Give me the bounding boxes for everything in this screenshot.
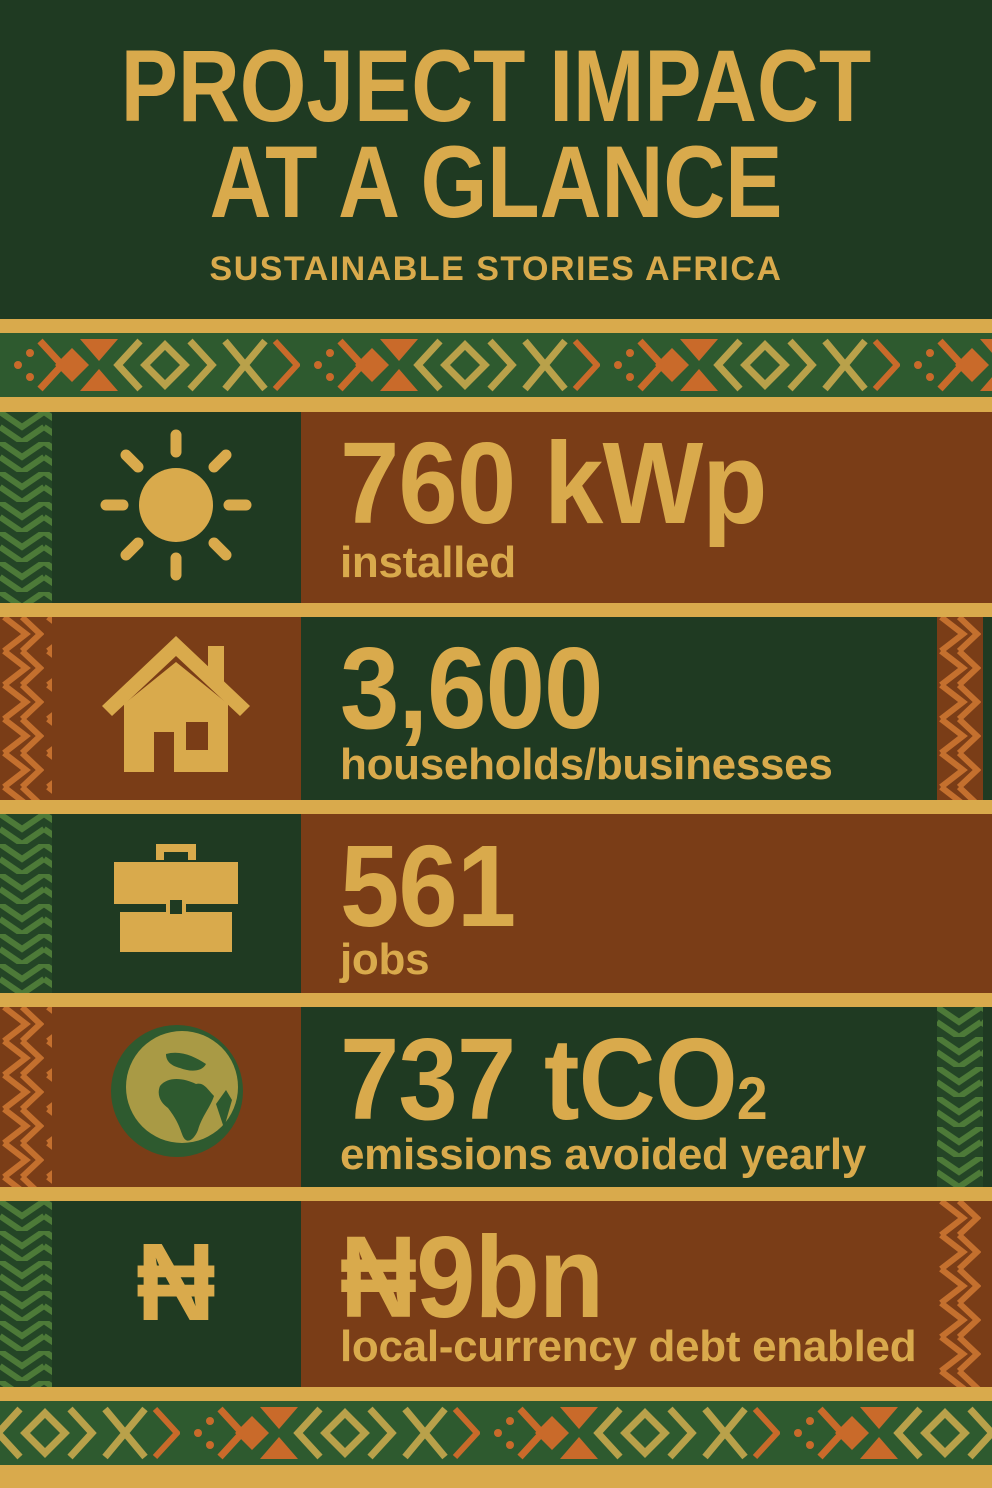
- row 2: households: [0, 617, 992, 800]
- icon: globe africa: [111, 1025, 243, 1157]
- stat: 561: 561: [340, 821, 515, 951]
- label: emissions avoided yearly: emissions avoided yearly: [340, 1130, 866, 1179]
- title: PROJECT IMPACT: [121, 29, 871, 143]
- title: [121, 29, 871, 239]
- decorative band bottom: [0, 1401, 992, 1465]
- decorative band top: [0, 333, 992, 397]
- subtitle: SUSTAINABLE STORIES AFRICA: [210, 250, 782, 288]
- title: AT A GLANCE: [210, 125, 782, 239]
- row 3: jobs: [0, 814, 992, 993]
- stat: ₦9bn: ₦9bn: [340, 1212, 603, 1342]
- label: local-currency debt enabled: local-currency debt enabled: [340, 1322, 916, 1371]
- header panel: [0, 0, 992, 319]
- row 5: naira: [0, 1201, 992, 1387]
- label: jobs: jobs: [340, 935, 429, 984]
- label: households/businesses: households/businesses: [340, 740, 833, 789]
- icon: sun: [100, 430, 252, 580]
- icon: naira sign: ₦: [136, 1221, 216, 1344]
- stat: 3,600: 3,600: [340, 623, 602, 753]
- stat: 760 kWp: 760 kWp: [340, 418, 767, 548]
- icon: briefcase: [114, 844, 238, 952]
- row 4: emissions: [0, 1007, 992, 1187]
- icon: house: [102, 636, 250, 772]
- label: installed: installed: [340, 538, 516, 587]
- row 1: installed capacity: [0, 412, 992, 603]
- stat: 737 tCO2: 737 tCO2: [340, 1014, 767, 1144]
